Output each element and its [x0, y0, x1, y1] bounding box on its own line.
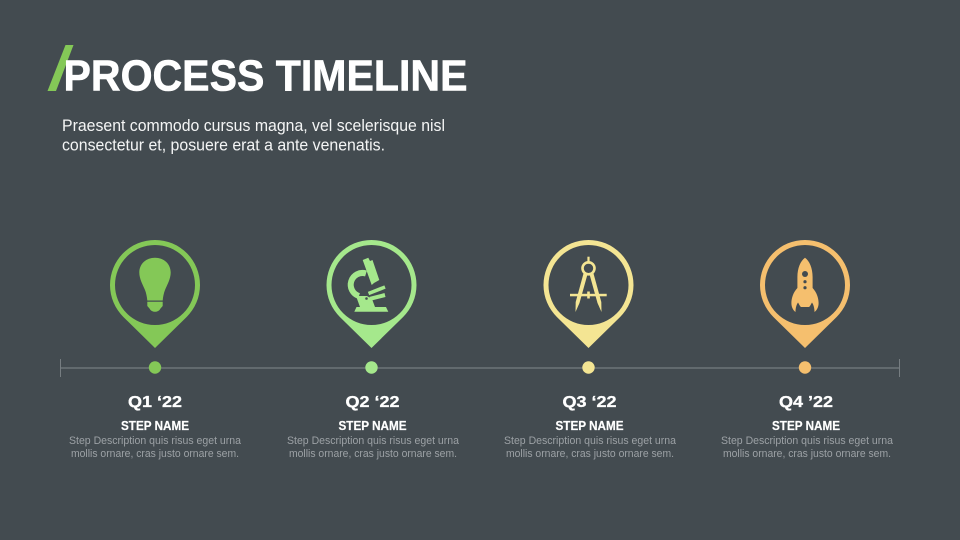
title: PROCESS TIMELINE: [64, 52, 468, 100]
milestone Q2: [287, 240, 460, 460]
subtitle: Praesent commodo cursus magna, vel scelerisque nisl: [62, 117, 445, 135]
icon: rocket: [791, 258, 819, 312]
description: Q4: [721, 435, 894, 460]
pin: Q4: [760, 240, 850, 348]
timeline axis: [60, 359, 900, 377]
step name: Q3: STEP NAME: [556, 419, 624, 433]
date: Q2: Q2 ‘22: [346, 394, 400, 411]
description: Q2: mollis ornare, cras justo ornare sem.: [289, 448, 457, 460]
pin: Q3: [543, 240, 634, 348]
description: Q2: [287, 435, 460, 460]
icon: microscope: [351, 258, 388, 312]
icon: light bulb: [139, 258, 171, 312]
description: Q1: mollis ornare, cras justo ornare sem.: [71, 448, 239, 460]
milestone Q3: [504, 240, 677, 460]
title slash accent: [48, 45, 74, 91]
date: Q3: Q3 ‘22: [562, 394, 616, 411]
description: Q1: [69, 435, 242, 460]
step name: Q4: STEP NAME: [772, 419, 840, 433]
description: Q3: [504, 435, 677, 460]
dot: Q3: [582, 361, 595, 374]
date: Q4: Q4 ’22: [779, 394, 833, 411]
dot: Q1: [149, 361, 161, 374]
dot: Q4: [799, 361, 811, 374]
description: Q1: Step Description quis risus eget urna: [69, 435, 242, 447]
description: Q4: mollis ornare, cras justo ornare sem.: [723, 448, 891, 460]
description: Q2: Step Description quis risus eget urna: [287, 435, 460, 447]
description: Q3: mollis ornare, cras justo ornare sem.: [506, 448, 674, 460]
description: Q3: Step Description quis risus eget urna: [504, 435, 677, 447]
subtitle: consectetur et, posuere erat a ante venenatis.: [62, 136, 385, 154]
pin: Q2: [326, 240, 417, 348]
description: Q4: Step Description quis risus eget urna: [721, 435, 894, 447]
pin: Q1: [110, 240, 200, 348]
step name: Q1: STEP NAME: [121, 419, 189, 433]
subtitle: [62, 117, 445, 154]
step name: Q2: STEP NAME: [338, 419, 406, 433]
milestone Q4: [721, 240, 894, 460]
date: Q1: Q1 ‘22: [128, 394, 182, 411]
icon: drafting compass: [570, 257, 607, 312]
dot: Q2: [365, 361, 378, 374]
milestone Q1: [69, 240, 242, 460]
